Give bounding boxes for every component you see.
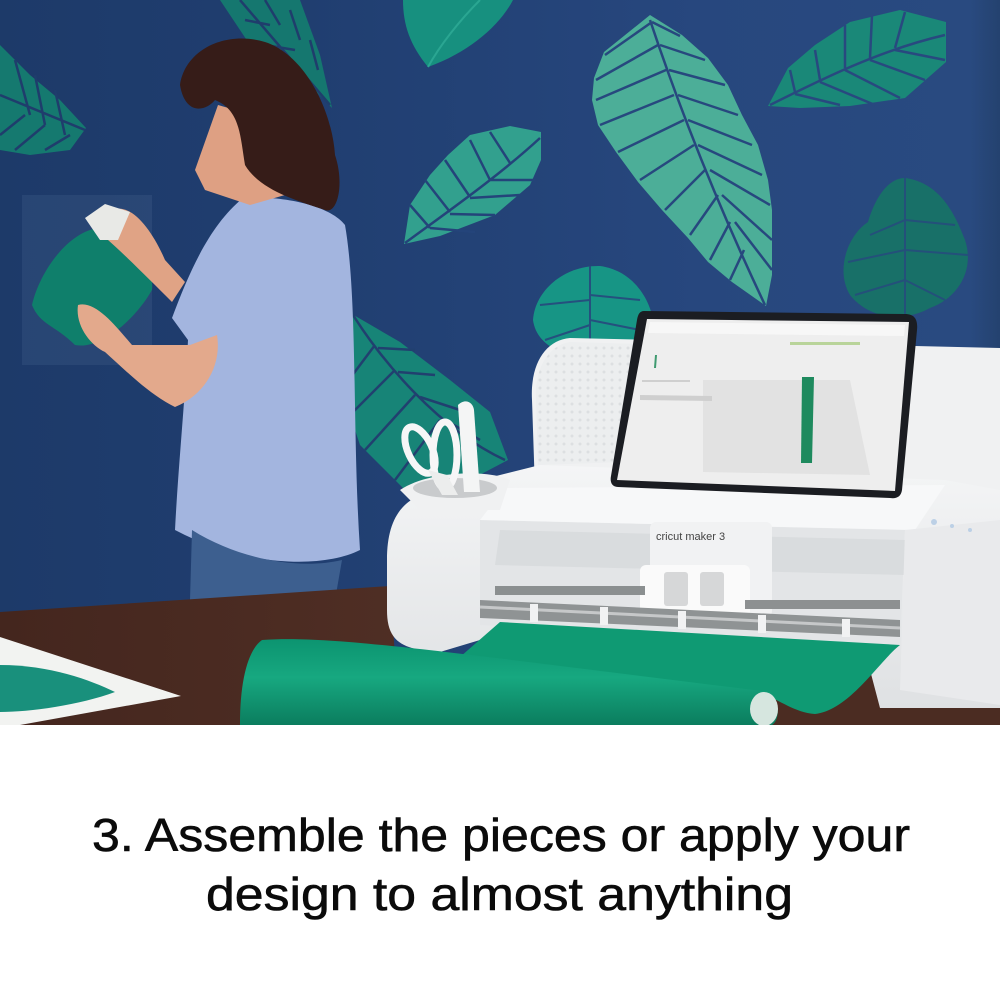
leaf: right monstera (843, 178, 968, 318)
vinyl sheet in machine (460, 622, 900, 714)
leaf on paper (0, 665, 115, 712)
leaf: top left fern (0, 45, 86, 155)
person: hair (180, 39, 340, 211)
caption line 1: 3. Assemble the pieces or apply your (92, 809, 910, 861)
machine: main body (387, 465, 1000, 708)
carriage: cricut cutting head (640, 522, 772, 617)
leaf: lower fern behind printer (345, 310, 508, 490)
vinyl roll end (750, 692, 778, 726)
leaf: center fern (404, 126, 541, 244)
person: neck and face (195, 105, 285, 205)
roller clips (530, 604, 850, 637)
table (0, 586, 400, 725)
tool: squeegee in hand (85, 204, 130, 240)
leaf: center monstera (533, 266, 654, 352)
tablet side controls (654, 355, 657, 368)
carriage: cricut cutting head: cricut maker 3 (656, 531, 725, 543)
person: forearm lower (78, 304, 218, 407)
machine: control buttons (931, 519, 972, 532)
person: blue t-shirt (172, 197, 360, 562)
person: jeans (190, 530, 342, 600)
tablet (611, 311, 917, 498)
vinyl roll (240, 639, 778, 725)
machine: tool cup (400, 473, 510, 510)
leaf: green leaf being applied (32, 228, 152, 346)
caption (92, 809, 910, 920)
paper sheet on table (0, 637, 181, 725)
scissors and tool (399, 401, 480, 495)
leaf: top center fern (220, 0, 332, 108)
leaf: top right fern (768, 10, 946, 108)
table right strip (640, 660, 1000, 725)
tablet caption (790, 342, 860, 345)
caption line 2: design to almost anything (206, 868, 793, 920)
machine: top shelf (480, 485, 945, 530)
machine: right end cap (900, 520, 1000, 705)
design strip on tablet (801, 377, 814, 463)
photo: wall background (0, 0, 1000, 725)
white caption background (0, 725, 1000, 1000)
leaf: top center solid (403, 0, 513, 67)
applied transfer sheet (22, 195, 152, 365)
machine: front recess (480, 520, 905, 645)
machine: recess shadow (495, 530, 905, 575)
leaf: large light fern (592, 15, 772, 306)
rollers (480, 586, 900, 637)
person: forearm upper (105, 209, 185, 302)
machine: raised lid (532, 338, 1000, 490)
